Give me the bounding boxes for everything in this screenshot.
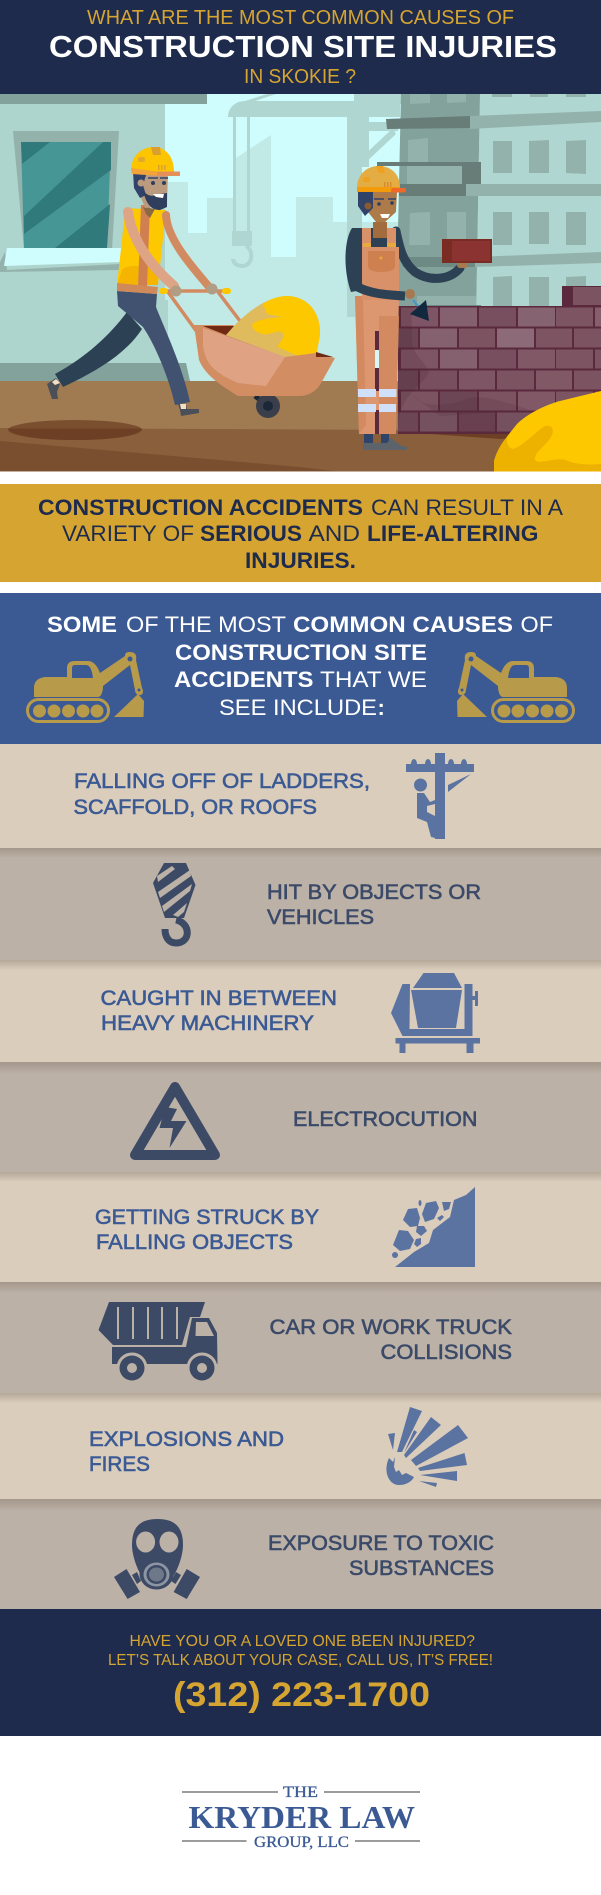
background skyline and crane bbox=[165, 94, 404, 381]
logo: The Kryder Law Group: GROUP, LLC bbox=[254, 1834, 349, 1851]
icon: rockfall bbox=[392, 1187, 475, 1267]
call to action text: HAVE YOU OR A LOVED ONE BEEN INJURED? bbox=[130, 1633, 475, 1650]
label: FALLING OFF OF LADDERS, bbox=[74, 770, 370, 793]
rear arm bbox=[166, 215, 210, 288]
sand pile bbox=[494, 391, 601, 472]
intro line two: LIFE-ALTERING bbox=[367, 521, 538, 546]
label: COLLISIONS bbox=[380, 1341, 512, 1364]
intro line three: INJURIES. bbox=[245, 548, 356, 573]
heading text: : bbox=[378, 695, 385, 720]
head bbox=[141, 175, 168, 208]
label: EXPLOSIONS AND bbox=[89, 1428, 284, 1451]
boots bbox=[364, 434, 389, 443]
vest bbox=[117, 208, 166, 285]
call to action text: LET’S TALK ABOUT YOUR CASE, CALL US, IT’S FREE! bbox=[108, 1652, 493, 1669]
left building with window bbox=[0, 94, 207, 381]
label bbox=[74, 770, 370, 819]
heading text: CONSTRUCTION SITE bbox=[175, 640, 427, 665]
barrow tub bbox=[194, 325, 335, 396]
icon: dump truck bbox=[98, 1302, 218, 1384]
heading text: ACCIDENTS bbox=[174, 667, 314, 692]
label bbox=[270, 1316, 512, 1364]
heading text: COMMON CAUSES bbox=[293, 612, 513, 637]
label: GETTING STRUCK BY bbox=[95, 1206, 319, 1229]
heading text: SOME bbox=[47, 612, 117, 637]
helmet bbox=[357, 166, 400, 188]
trowel bbox=[413, 300, 418, 306]
panel: falling objects bbox=[0, 1172, 601, 1282]
header panel bbox=[0, 0, 601, 94]
forearm across body bbox=[353, 284, 405, 296]
helmet bbox=[131, 147, 174, 174]
heading line: in Skokie: IN SKOKIE ? bbox=[244, 66, 356, 88]
hand and brick bbox=[457, 263, 468, 268]
heading text: SEE INCLUDE bbox=[219, 695, 377, 720]
intro line two: VARIETY OF bbox=[62, 521, 194, 546]
icon: high voltage warning bbox=[135, 1087, 215, 1155]
head bbox=[373, 222, 387, 238]
intro line one: CONSTRUCTION ACCIDENTS bbox=[38, 495, 363, 520]
logo: The Kryder Law Group bbox=[182, 1784, 420, 1851]
ground bbox=[0, 381, 506, 472]
call to action text bbox=[108, 1633, 493, 1669]
label: CAUGHT IN BETWEEN bbox=[100, 987, 337, 1010]
label bbox=[95, 1206, 319, 1254]
label bbox=[89, 1428, 284, 1476]
panel: call to action bbox=[0, 1609, 601, 1736]
intro line two bbox=[62, 521, 538, 546]
icon: cement mixer bbox=[391, 973, 480, 1053]
wheelbarrow bbox=[159, 284, 335, 418]
label: FALLING OBJECTS bbox=[96, 1231, 293, 1254]
label: VEHICLES bbox=[267, 906, 374, 929]
illustration: construction site with two workers bbox=[0, 94, 601, 472]
label: EXPOSURE TO TOXIC bbox=[268, 1532, 494, 1555]
label: SUBSTANCES bbox=[349, 1557, 494, 1580]
panel: toxic substances bbox=[0, 1499, 601, 1609]
label bbox=[268, 1532, 494, 1580]
shoes bbox=[47, 378, 199, 416]
phone number: (312) 223-1700 bbox=[173, 1676, 430, 1714]
icon: excavator right bbox=[457, 652, 574, 722]
label: CAR OR WORK TRUCK bbox=[270, 1316, 512, 1339]
torso bbox=[345, 228, 362, 292]
label: HIT BY OBJECTS OR bbox=[267, 881, 481, 904]
wheel bbox=[255, 394, 280, 418]
icon: excavator left bbox=[28, 652, 144, 722]
label: HEAVY MACHINERY bbox=[101, 1012, 314, 1035]
intro line two: SERIOUS bbox=[200, 521, 302, 546]
label: ELECTROCUTION bbox=[293, 1108, 478, 1131]
held arm bbox=[396, 231, 460, 278]
label: SCAFFOLD, OR ROOFS bbox=[74, 796, 317, 819]
near arm bbox=[128, 212, 174, 286]
icon: crane hook bbox=[153, 863, 196, 943]
label bbox=[267, 881, 481, 929]
brick wall bbox=[398, 286, 601, 439]
panel: falling off ladders bbox=[0, 744, 601, 848]
label: FIRES bbox=[89, 1453, 150, 1476]
icon: worker on utility pole bbox=[406, 753, 474, 839]
heading line: what are the most common causes of: WHAT ARE THE MOST COMMON CAUSES OF bbox=[87, 7, 514, 29]
logo: The Kryder Law Group: KRYDER LAW bbox=[188, 1799, 415, 1835]
panel: electrocution bbox=[0, 1062, 601, 1172]
front leg bbox=[117, 291, 190, 405]
panel: explosions bbox=[0, 1393, 601, 1499]
panel: truck collisions bbox=[0, 1282, 601, 1393]
icon: explosion bbox=[386, 1407, 468, 1487]
intro line two: AND bbox=[308, 521, 360, 546]
legs bbox=[355, 296, 399, 434]
worker pushing wheelbarrow bbox=[47, 147, 210, 416]
overalls bib bbox=[362, 228, 399, 300]
panel: blue heading band bbox=[0, 593, 601, 744]
handles bbox=[163, 291, 240, 332]
sand load bbox=[226, 296, 320, 357]
panel: gold intro band bbox=[0, 484, 601, 582]
panel: hit by objects bbox=[0, 848, 601, 960]
icon: gas mask bbox=[114, 1519, 200, 1599]
logo: The Kryder Law Group: THE bbox=[283, 1784, 318, 1801]
label bbox=[100, 987, 337, 1035]
back leg bbox=[55, 312, 142, 387]
intro line one: CAN RESULT IN A bbox=[371, 495, 563, 520]
heading text: OF THE MOST bbox=[126, 612, 286, 637]
worker laying bricks bbox=[345, 166, 492, 450]
heading text bbox=[47, 612, 553, 720]
panel: caught in machinery bbox=[0, 960, 601, 1062]
heading text: THAT WE bbox=[320, 667, 427, 692]
heading text: OF bbox=[520, 612, 553, 637]
intro line one bbox=[38, 495, 563, 520]
title: CONSTRUCTION SITE INJURIES bbox=[49, 29, 557, 64]
right building with tower bbox=[377, 94, 601, 320]
